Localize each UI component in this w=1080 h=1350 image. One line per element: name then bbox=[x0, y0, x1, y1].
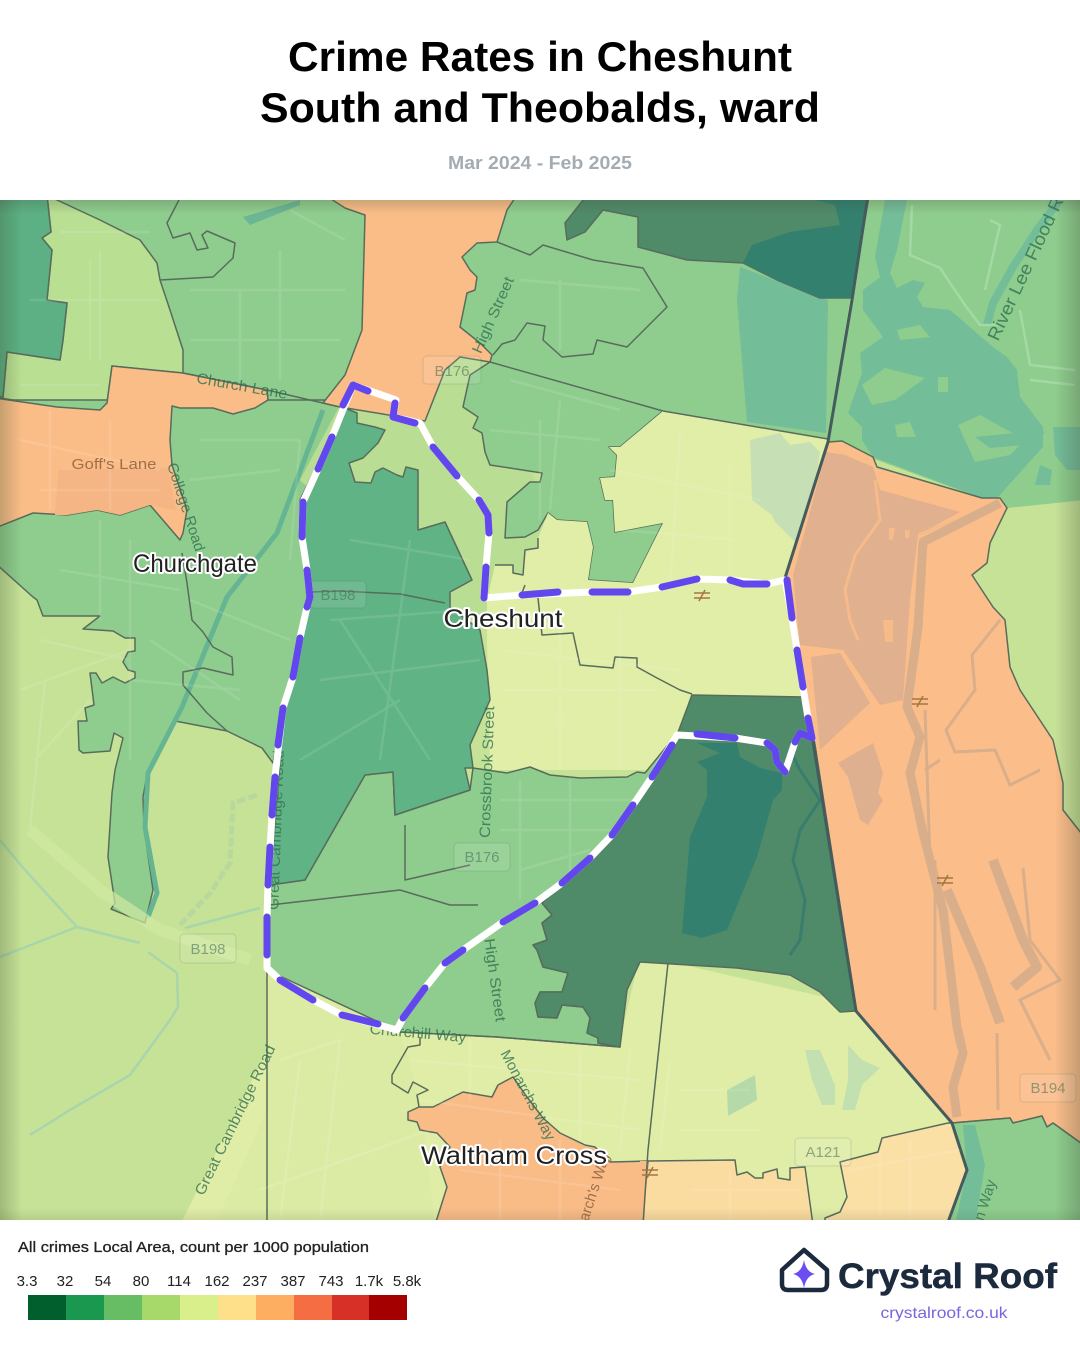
canals and railway bbox=[907, 503, 1000, 1117]
road badge: B194: B194 bbox=[1030, 1080, 1066, 1097]
area: Theobalds dark green bbox=[533, 695, 856, 1047]
road badge: B198 centre bbox=[310, 581, 366, 608]
legend bbox=[17, 1240, 422, 1320]
area: middle green bbox=[463, 362, 663, 583]
title: South and Theobalds, ward bbox=[260, 84, 820, 131]
place label: Waltham Cross: Waltham Cross bbox=[421, 1142, 607, 1170]
wetlands: top-right bbox=[848, 200, 1043, 498]
area: top dark green bbox=[565, 195, 870, 298]
area: eastern orange bbox=[785, 441, 1080, 1146]
area: wetlands north bbox=[737, 267, 828, 433]
area: top band medium green bbox=[0, 195, 520, 420]
road labels: Churchill Way bbox=[369, 1021, 468, 1046]
road labels bbox=[72, 160, 1080, 1250]
area: pale green around Cheshunt north bbox=[300, 357, 560, 620]
boundary: top-left small parcels bbox=[160, 198, 235, 280]
area: bottom pale orange bbox=[642, 1160, 813, 1225]
road badge: A121 bbox=[795, 1138, 851, 1166]
line: Church Lane bbox=[183, 373, 425, 421]
boundary: Cheshunt inner bbox=[495, 411, 828, 694]
boundary: south lines bbox=[267, 963, 668, 1225]
legend scale: 114 bbox=[167, 1273, 191, 1290]
road badge: B176 south bbox=[454, 843, 510, 871]
area: bottom right green bbox=[947, 1116, 1080, 1225]
area: Goff's Lane detail bbox=[55, 468, 176, 515]
legend scale: 32 bbox=[57, 1273, 73, 1290]
area: Cheshunt pale yellow bbox=[487, 411, 828, 770]
title: Crime Rates in Cheshunt bbox=[288, 33, 792, 80]
area: top-right green bbox=[828, 195, 1080, 508]
road labels: Goff's Lane bbox=[72, 456, 156, 473]
legend scale: 743 bbox=[318, 1273, 344, 1290]
map bbox=[0, 200, 1080, 1220]
area: orange north bbox=[323, 195, 517, 421]
road badge: B176 north bbox=[423, 356, 481, 384]
road labels: Church Lane bbox=[195, 370, 289, 403]
legend scale: 1.7k bbox=[355, 1273, 384, 1290]
road badge: B176 north: B176 bbox=[434, 363, 470, 380]
area: ward west dark green bbox=[270, 408, 490, 885]
rivers and canals west bbox=[30, 830, 250, 960]
boundary: ward inner bbox=[270, 591, 478, 905]
road badge: B198 centre: B198 bbox=[320, 587, 356, 604]
place label: Cheshunt: Cheshunt bbox=[444, 605, 563, 633]
lake: pale ponds bbox=[750, 433, 820, 542]
road labels: High Street bbox=[469, 273, 518, 356]
water: top teal bbox=[743, 195, 868, 298]
lake: Theobalds bbox=[682, 743, 782, 938]
lines inside reservoirs bbox=[845, 480, 1000, 640]
road labels: High Street bbox=[480, 937, 509, 1024]
place label: Churchgate: Churchgate bbox=[133, 550, 257, 578]
website: crystalroof.co.uk bbox=[880, 1305, 1009, 1322]
area: south ward green bbox=[267, 730, 680, 1047]
road badge: B198 west bbox=[180, 934, 236, 963]
legend scale: 54 bbox=[95, 1273, 111, 1290]
logo: Crystal Roof bbox=[780, 1248, 1058, 1322]
railway lines bbox=[785, 195, 868, 578]
river: Theobalds bbox=[790, 750, 820, 955]
legend scale: 162 bbox=[204, 1273, 230, 1290]
area: west green bbox=[0, 400, 350, 923]
area: south yellow bbox=[180, 955, 967, 1225]
ward boundary bbox=[267, 385, 812, 1030]
icon: house with star bbox=[782, 1250, 827, 1290]
date range subtitle: Mar 2024 - Feb 2025 bbox=[448, 153, 632, 173]
boundary: top centre parcel bbox=[493, 242, 667, 357]
map edge shading bbox=[0, 200, 1080, 1220]
wordmark: Crystal Roof bbox=[838, 1257, 1057, 1296]
area: top-left pale green bbox=[0, 195, 183, 410]
road badge: B176 south: B176 bbox=[464, 849, 500, 866]
legend scale: 80 bbox=[133, 1273, 149, 1290]
road labels: Monarchs Way bbox=[497, 1047, 559, 1144]
road labels: Crossbrook Street bbox=[477, 705, 498, 838]
park ponds bbox=[805, 1045, 880, 1110]
legend scale: 387 bbox=[280, 1273, 306, 1290]
area: Goff's Lane orange bbox=[0, 366, 268, 540]
road labels: Great Cambridge Road bbox=[265, 750, 288, 910]
area: top-left dark green bbox=[0, 195, 67, 397]
legend scale: 3.3 bbox=[17, 1273, 37, 1290]
road labels: College Road bbox=[163, 461, 208, 554]
icons: rail stations bbox=[642, 590, 953, 1178]
legend scale: 5.8k bbox=[393, 1273, 422, 1290]
legend scale bbox=[17, 1273, 422, 1320]
road network bbox=[20, 210, 960, 1220]
legend title: All crimes Local Area, count per 1000 population bbox=[18, 1240, 369, 1256]
road badge: B194 bbox=[1020, 1074, 1076, 1102]
reservoirs on orange bbox=[793, 452, 960, 705]
boundary: west inner lines bbox=[182, 553, 233, 731]
road labels: Great Cambridge Road bbox=[192, 1042, 279, 1198]
road badge: B198 west: B198 bbox=[190, 941, 226, 958]
title bbox=[260, 33, 820, 131]
area: top centre green bbox=[460, 195, 870, 439]
legend scale: 237 bbox=[242, 1273, 268, 1290]
road badge: A121: A121 bbox=[805, 1144, 841, 1161]
area: Waltham Cross orange bbox=[408, 1077, 648, 1225]
river: west channel bbox=[145, 410, 323, 917]
